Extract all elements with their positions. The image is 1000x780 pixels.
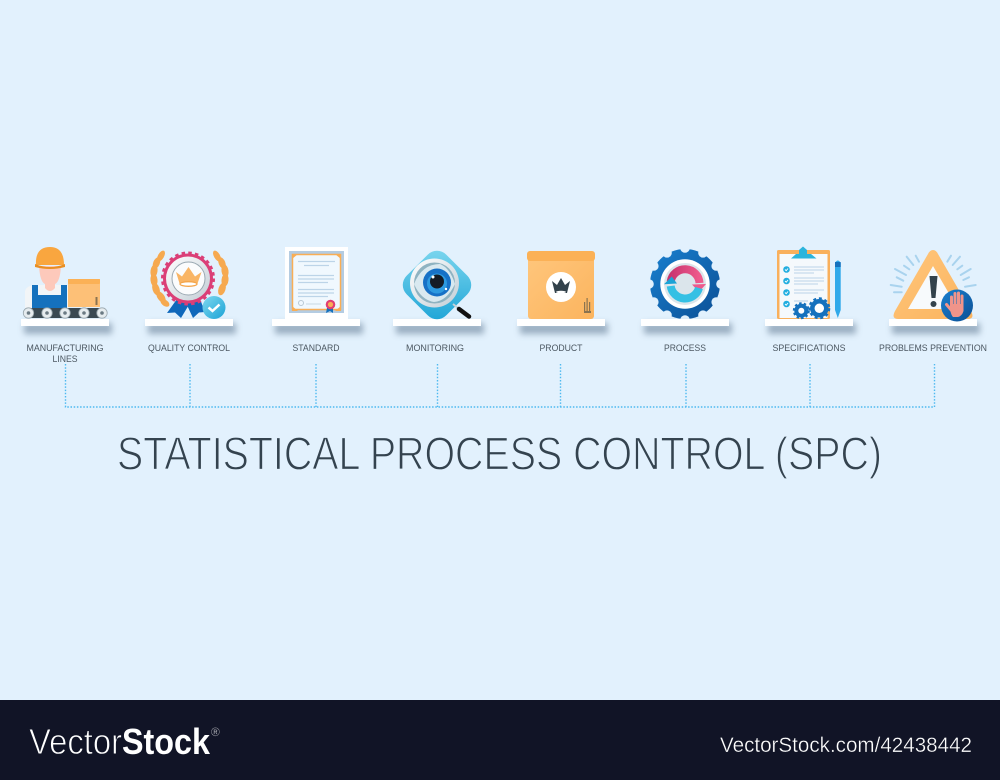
icon: award rosette: [150, 249, 229, 319]
dotted connector bracket: [66, 364, 934, 407]
item: quality control: [145, 249, 236, 353]
icon: gear with cycle arrows: [644, 243, 726, 325]
shelf: [272, 319, 363, 334]
shelf: [393, 319, 484, 334]
item: monitoring: [393, 245, 484, 353]
footer logo: registered mark: ®: [211, 725, 220, 739]
label: standard: STANDARD: [292, 343, 340, 353]
item: product: [517, 251, 608, 353]
label: problems prevention: PROBLEMS PREVENTION: [879, 343, 987, 353]
icon: eye under magnifier: [397, 245, 477, 325]
item: problems prevention: [879, 250, 987, 353]
label: quality control: QUALITY CONTROL: [148, 343, 230, 353]
label: lines: LINES: [52, 354, 78, 364]
label: monitoring: MONITORING: [406, 343, 464, 353]
item: standard: [272, 247, 363, 353]
footer logo: VectorStock: [29, 721, 211, 762]
title: STATISTICAL PROCESS CONTROL (SPC): [117, 428, 882, 480]
item: specifications: [765, 246, 856, 353]
footer logo: VectorStock: Stock: [122, 721, 211, 762]
shelf: [765, 319, 856, 334]
shelf: [641, 319, 732, 334]
shelf: [517, 319, 608, 334]
label: process: PROCESS: [664, 343, 706, 353]
icon: warning triangle with stop hand: [891, 250, 976, 322]
shelf: [145, 319, 236, 334]
icon: certificate: [285, 247, 348, 319]
icon: clipboard, gears and pen: [777, 246, 841, 319]
icon: worker on conveyor: [23, 247, 107, 318]
label: specifications: SPECIFICATIONS: [772, 343, 846, 353]
shelf: [21, 319, 112, 334]
footer bar: [0, 700, 1000, 780]
item: manufacturing lines: [21, 247, 112, 364]
shelf: [889, 319, 980, 334]
label: product: PRODUCT: [540, 343, 583, 353]
icon: product box with crown: [527, 251, 595, 319]
label: manufacturing lines: MANUFACTURING: [26, 343, 104, 353]
footer logo: VectorStock: Vector: [29, 721, 122, 762]
footer image id: VectorStock.com/42438442: [720, 734, 972, 757]
item: process: [641, 243, 732, 353]
